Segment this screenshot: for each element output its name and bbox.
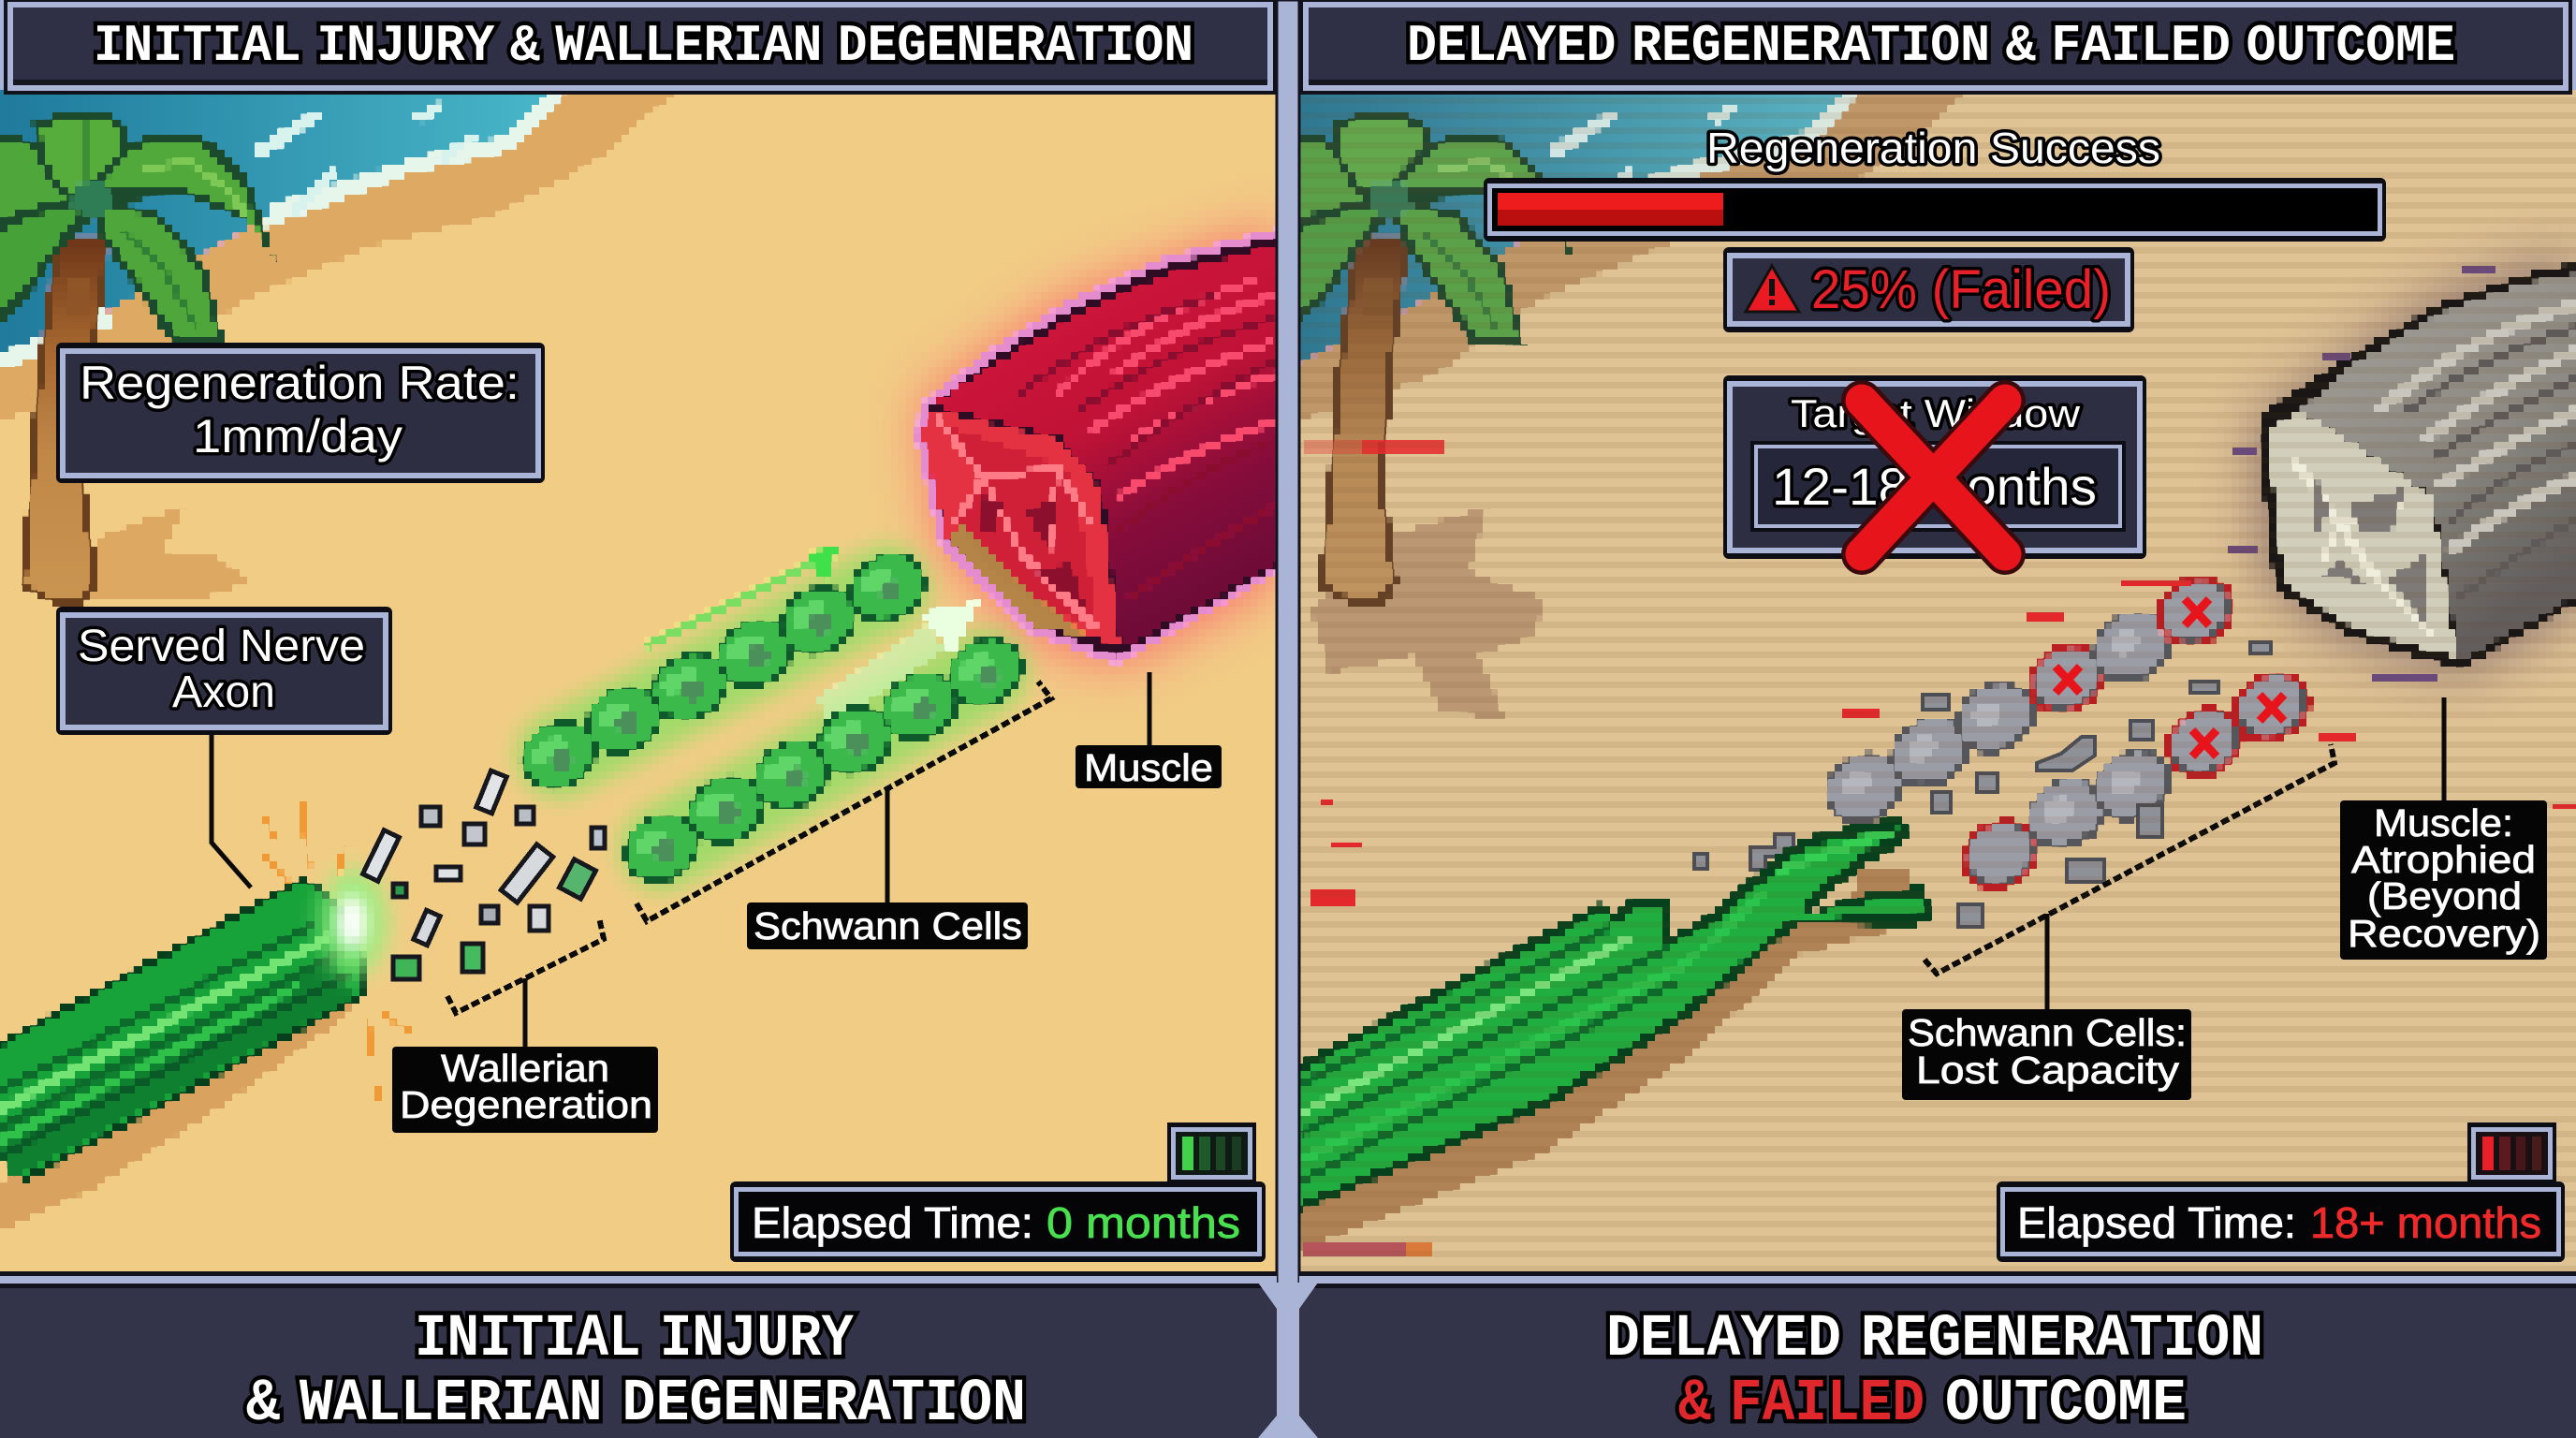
center ornament [1258, 1283, 1318, 1438]
callout: severed nerve axon [56, 607, 392, 735]
label: schwann cells lost capacity [1902, 1009, 2191, 1100]
foam [0, 90, 567, 371]
callout: regeneration rate [56, 343, 545, 483]
schwann cells row one [507, 539, 939, 804]
target window card [1723, 375, 2146, 559]
footer: left [0, 1271, 1277, 1438]
ocean water [0, 90, 562, 363]
panel: left beach scene [0, 90, 1277, 1275]
foam [1559, 90, 1863, 229]
footer failed text: & FAILED [1678, 1371, 1925, 1438]
elapsed value: 0 months [1046, 1198, 1240, 1247]
inner window fill [1758, 448, 2118, 524]
label: muscle atrophied: Atrophied [2351, 838, 2536, 881]
wallerian bracket [447, 917, 604, 1013]
debris fragments [363, 770, 605, 979]
rate value: 1mm/day [193, 410, 402, 462]
label: muscle atrophied: Recovery) [2348, 912, 2540, 955]
failed badge [1723, 247, 2134, 332]
gray debris [1694, 642, 2271, 927]
wet sand [1299, 90, 1970, 421]
label: wallerian degeneration: Wallerian [441, 1047, 609, 1090]
axon text: Axon [172, 668, 275, 717]
icon: battery right [2467, 1123, 2556, 1184]
wide glowing arrow [824, 601, 979, 712]
elapsed label: Elapsed Time: [752, 1198, 1033, 1247]
header: right [1299, 0, 2572, 95]
icon: battery left [1167, 1123, 1256, 1184]
elapsed value: 18+ months [2310, 1198, 2541, 1247]
injury flash [338, 896, 366, 948]
leader lines left [212, 672, 1149, 1047]
palm shadow [82, 506, 250, 601]
frayed nerve [1299, 816, 1932, 1250]
schwann cell glow [559, 588, 986, 848]
inner window box [1752, 443, 2124, 530]
elapsed label: Elapsed Time: [2017, 1198, 2296, 1247]
label: schwann cells lost capacity: Lost Capacity [1916, 1049, 2180, 1092]
header text right: DELAYED REGENERATION & FAILED OUTCOME [1407, 16, 2455, 76]
label: muscle atrophied: Muscle: [2374, 801, 2513, 844]
gray cells upper row [1811, 562, 2248, 839]
elapsed time left [730, 1181, 1266, 1262]
divider [1277, 0, 1299, 1438]
months text: 12-18 months [1772, 457, 2097, 516]
wave highlights [251, 101, 477, 217]
label: muscle atrophied [2340, 800, 2547, 960]
ocean water [1299, 90, 1858, 363]
wet sand [0, 90, 678, 421]
glitch streaks [1303, 266, 2576, 1256]
bracket [1925, 744, 2334, 974]
gray cells lower row [1948, 657, 2324, 904]
healthy muscle [915, 228, 1277, 665]
footer text line two: & WALLERIAN DEGENERATION [246, 1371, 1026, 1438]
icon: warning triangle [1746, 266, 1799, 312]
nerve shadow [1299, 866, 1928, 1250]
red cross [1862, 401, 2005, 554]
wave highlights [1544, 101, 1741, 217]
elapsed time right [1997, 1181, 2565, 1262]
nerve shadow [0, 994, 356, 1231]
footer: right [1299, 1271, 2576, 1438]
sparks [260, 803, 412, 1103]
footer text line one: INITIAL INJURY [415, 1306, 855, 1373]
schwann cells row two [610, 624, 1037, 897]
header: left [4, 0, 1277, 95]
footer outcome text: OUTCOME [1945, 1371, 2187, 1438]
schwann bracket [637, 682, 1051, 921]
atrophied muscle [2258, 262, 2576, 670]
label: regeneration success: Regeneration Success [1706, 124, 2160, 172]
palm tree [1299, 114, 1574, 604]
muscle glow [922, 225, 1277, 665]
label: schwann cells lost capacity: Schwann Cells: [1908, 1011, 2187, 1054]
label: muscle atrophied: (Beyond [2367, 874, 2522, 917]
severed nerve text: Served Nerve [78, 622, 365, 671]
thin green arrow [646, 547, 839, 646]
target window text: Target Window [1791, 391, 2081, 435]
nerve stump [0, 866, 385, 1161]
failed text: 25% (Failed) [1811, 259, 2111, 320]
panel: right beach scene [1299, 90, 2576, 1275]
scanline overlay [1299, 90, 2576, 1275]
palm tree [0, 114, 275, 604]
header text left: INITIAL INJURY & WALLERIAN DEGENERATION [94, 16, 1193, 76]
regeneration rate text: Regeneration Rate: [80, 357, 520, 409]
injury glow [320, 868, 388, 976]
footer text line one: DELAYED REGENERATION [1606, 1306, 2263, 1373]
label: wallerian degeneration [392, 1047, 658, 1133]
progress bar [1484, 178, 2386, 242]
atrophy glow [2256, 253, 2576, 674]
leader lines right [2047, 697, 2444, 1009]
label: schwann cells: Schwann Cells [754, 904, 1022, 947]
palm shadow [1310, 506, 1544, 721]
cell X marks [2056, 599, 2284, 756]
label: wallerian degeneration: Degeneration [400, 1083, 652, 1126]
label: muscle: Muscle [1084, 746, 1213, 789]
